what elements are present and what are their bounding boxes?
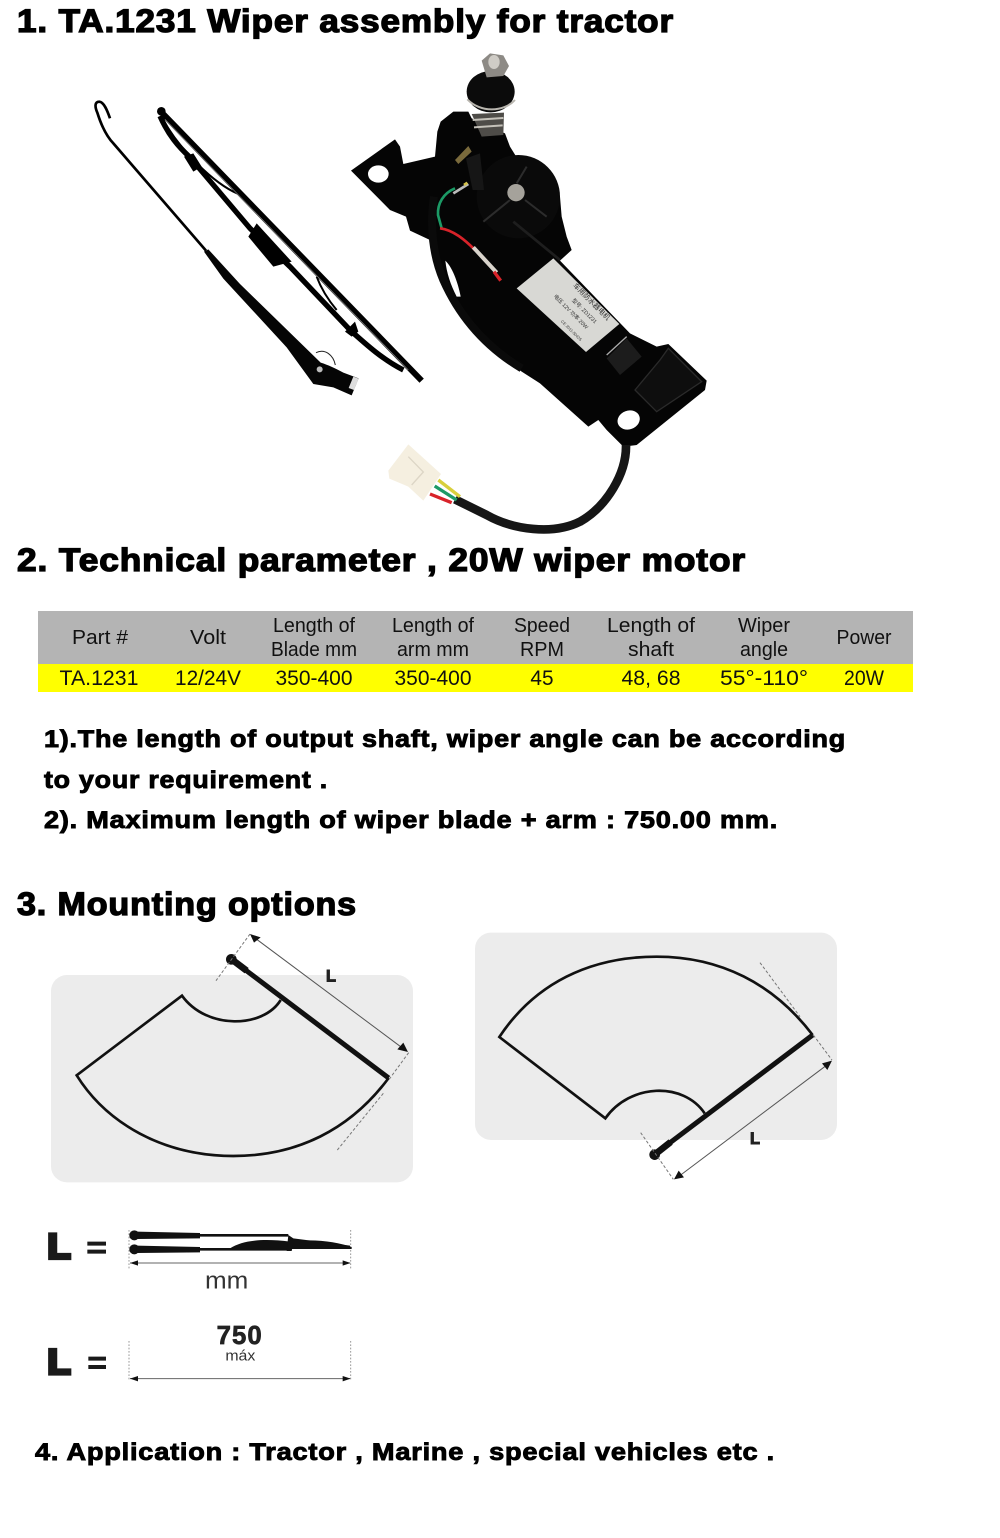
- table header background: [38, 611, 913, 664]
- metal shaft: [472, 113, 504, 137]
- label text: [552, 281, 612, 342]
- diagram: mounting option upper sweep: L: [750, 1130, 760, 1148]
- table header labels: Length of: [273, 615, 355, 637]
- table: technical parameters: [38, 611, 913, 692]
- shaft nut: [482, 53, 509, 77]
- table values: 350-400: [276, 667, 352, 690]
- table header labels: Volt: [190, 627, 226, 649]
- table header labels: Power: [836, 627, 892, 649]
- diagram: L equals arm and blade length: mm: [205, 1269, 248, 1295]
- connector: [388, 444, 441, 501]
- table header labels: Speed: [514, 615, 570, 637]
- rubber loop cable: [432, 197, 522, 368]
- table header labels: shaft: [628, 639, 674, 661]
- notes text block: 1).The length of output shaft, wiper angle can be according: [44, 726, 846, 753]
- table header labels: Length of: [392, 615, 474, 637]
- label text: CE 2011-50425: [560, 319, 584, 342]
- diagram: L equals arm and blade length: L: [47, 1227, 71, 1266]
- notes text block: to your requirement .: [44, 767, 328, 794]
- table header labels: Length of: [607, 615, 695, 637]
- table values: TA.1231: [60, 667, 138, 690]
- notes text block: 2). Maximum length of wiper blade + arm : 750.00 mm.: [44, 807, 778, 834]
- notes text block: [44, 726, 846, 834]
- gear housing: [477, 155, 560, 238]
- diagram: mounting option lower sweep: L: [326, 968, 336, 986]
- table values: 45: [530, 667, 554, 690]
- table header labels: Part #: [72, 627, 129, 649]
- diagram: L equals 750 max: máx: [225, 1348, 256, 1364]
- rubber grommet: [467, 71, 515, 112]
- power cable: [455, 445, 626, 529]
- table values: [60, 667, 884, 690]
- label plate: [517, 258, 619, 352]
- mounting hole left: [368, 165, 389, 183]
- table header labels: angle: [740, 639, 788, 661]
- wires: [438, 183, 501, 281]
- table header labels: RPM: [520, 639, 564, 661]
- icon: wiper blade: [157, 107, 422, 381]
- end cap: [635, 348, 702, 412]
- diagram: L equals 750 max: L: [47, 1343, 71, 1382]
- mounting hole right: [615, 407, 643, 433]
- title: section 4 application: 4. Application : Tractor , Marine , special vehicles etc .: [35, 1439, 775, 1466]
- diagram: L equals 750 max: [47, 1320, 351, 1382]
- diagram: mounting option lower sweep: [51, 934, 413, 1182]
- table values: 12/24V: [175, 667, 241, 690]
- motor bracket and body: [351, 112, 707, 447]
- title: section 3: 3. Mounting options: [17, 886, 357, 922]
- table values: 350-400: [394, 667, 472, 690]
- arm silhouettes: [129, 1230, 352, 1254]
- table row background: [38, 664, 913, 692]
- icon: wiper arm: [96, 102, 359, 395]
- label text: 电压 12V 功率 20W: [552, 292, 591, 331]
- diagram: mounting option upper sweep: [475, 933, 837, 1179]
- label text: 车用防水器电机: [571, 281, 612, 322]
- table values: 20W: [844, 667, 884, 690]
- title: section 2: 2. Technical parameter , 20W wiper motor: [17, 542, 746, 578]
- title: section 1: 1. TA.1231 Wiper assembly for tractor: [17, 3, 674, 39]
- table header labels: Blade mm: [271, 639, 357, 661]
- table header labels: Wiper: [738, 615, 790, 637]
- table header labels: [72, 615, 892, 661]
- diagram: L equals arm and blade length: [47, 1227, 352, 1295]
- connector wires: [430, 480, 460, 503]
- diagram: L equals 750 max: 750: [217, 1320, 263, 1350]
- table header labels: arm mm: [397, 639, 469, 661]
- icon: wiper motor: [351, 53, 707, 529]
- table values: 55°-110°: [720, 667, 808, 690]
- table values: 48, 68: [622, 667, 680, 690]
- label text: 型号: ZD1231: [570, 296, 599, 325]
